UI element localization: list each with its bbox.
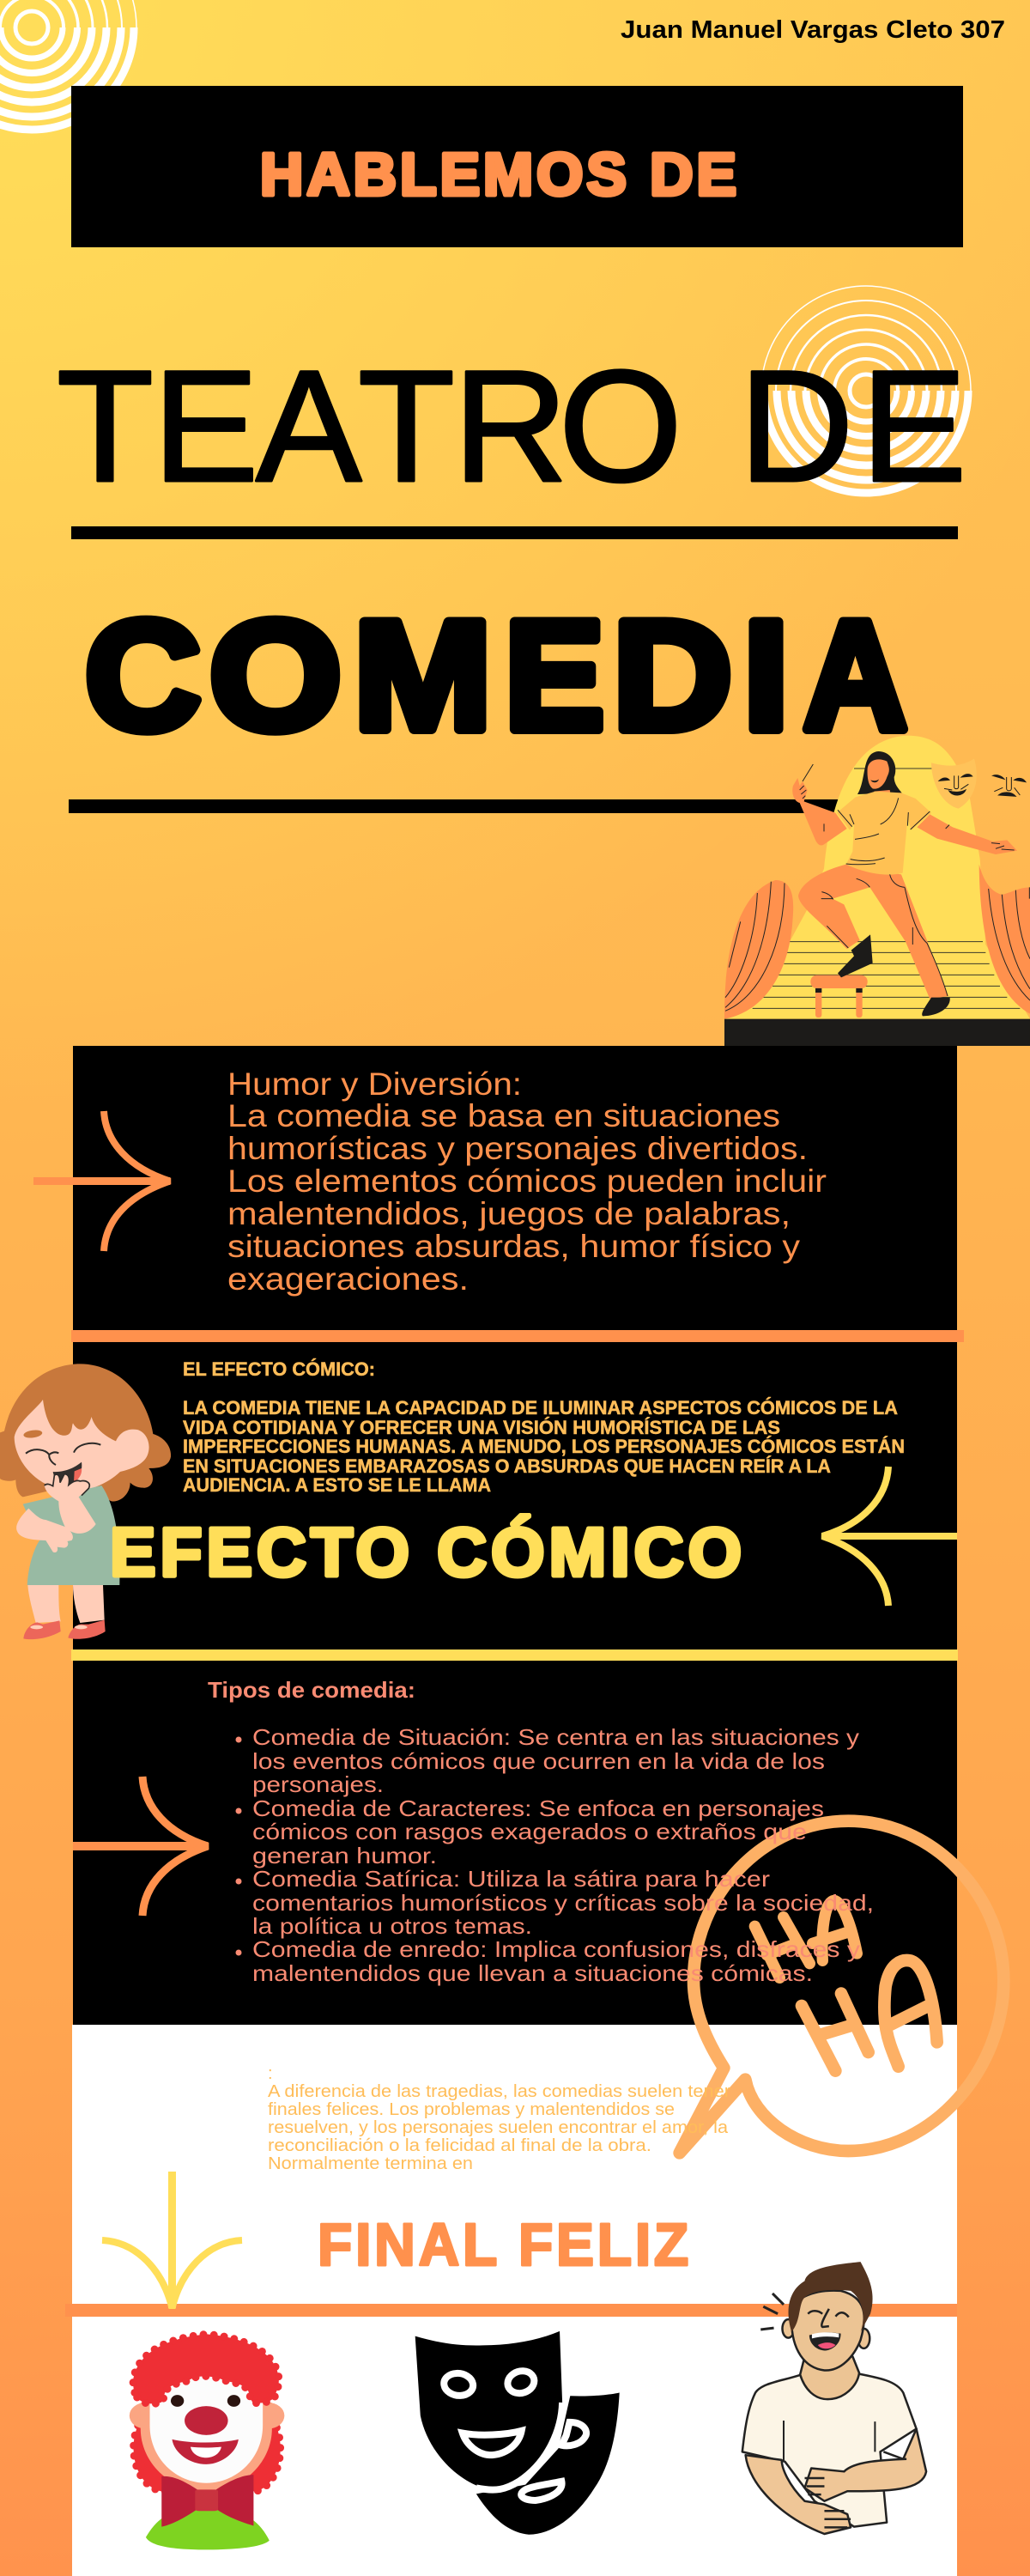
title: comedia: I <box>743 589 789 762</box>
title: comedia: E <box>505 589 604 762</box>
heading: hablemos de: HABLEMOS DE <box>260 141 740 208</box>
title: comedia: D <box>613 589 732 762</box>
decorative spiral: top left <box>0 0 136 130</box>
text block: tipos de comedia: generan humor. <box>252 1843 437 1868</box>
text block: tipos de comedia: malentendidos que llevan a situaciones cómicas. <box>252 1960 813 1986</box>
title: comedia: M <box>354 589 492 762</box>
text block: efecto cómico intro <box>183 1358 905 1496</box>
text block: humor: malentendidos, juegos de palabras, <box>227 1196 791 1231</box>
panel: efecto cómico <box>73 1342 957 1649</box>
divider rule lower <box>69 799 858 813</box>
text block: humor: exageraciones. <box>227 1261 469 1297</box>
text block: efecto cómico intro: IMPERFECCIONES HUMANAS. A MENUDO, LOS PERSONAJES CÓMICOS ESTÁN <box>183 1436 905 1457</box>
heading: efecto cómico: EFECTO CÓMICO <box>110 1514 746 1590</box>
text block: tipos de comedia: los eventos cómicos que ocurren en la vida de los <box>252 1748 825 1774</box>
bullet dots <box>235 1736 242 1956</box>
title: comedia: O <box>209 589 342 762</box>
divider yellow <box>71 1649 958 1661</box>
text block: tipos de comedia: personajes. <box>252 1771 384 1797</box>
title: comedia: C <box>85 589 201 762</box>
text block: final feliz intro: resuelven, y los personajes suelen encontrar el amor, la <box>268 2118 729 2137</box>
decorative spiral: behind title <box>761 286 971 493</box>
arrow: down yellow <box>102 2172 242 2308</box>
arrow: right orange tipos <box>73 1777 208 1916</box>
illustration: performer on stage <box>724 736 1030 1046</box>
icon: theatre masks <box>415 2331 620 2535</box>
text block: efecto cómico intro: EL EFECTO CÓMICO: <box>183 1358 375 1380</box>
panel: humor y diversión <box>33 1046 957 1331</box>
heading: final feliz: FINAL FELIZ <box>318 2211 692 2278</box>
text block: tipos de comedia: Comedia de Situación: Se centra en las situaciones y <box>252 1724 859 1750</box>
panel: final feliz <box>72 2025 957 2576</box>
text block: final feliz intro: A diferencia de las tragedias, las comedias suelen tener <box>268 2082 730 2101</box>
author name: Juan Manuel Vargas Cleto 307 <box>621 16 1005 44</box>
text block: humor: humorísticas y personajes divertidos. <box>227 1131 808 1166</box>
title: teatro de: TEATRO DE <box>57 338 966 515</box>
text block: final feliz intro: : <box>268 2064 273 2083</box>
text block: final feliz intro: finales felices. Los problemas y malentendidos se <box>268 2100 675 2119</box>
divider orange lower <box>65 2304 957 2317</box>
header banner <box>71 86 963 247</box>
divider rule upper <box>71 526 958 539</box>
text block: humor: La comedia se basa en situaciones <box>227 1098 780 1133</box>
illustration: clown <box>130 2334 284 2549</box>
arrow: left yellow <box>822 1467 957 1606</box>
panel: tipos de comedia <box>73 1661 957 2025</box>
text block: tipos de comedia: Comedia de Caracteres: Se enfoca en personajes <box>252 1795 824 1821</box>
title: comedia: A <box>803 589 907 762</box>
text block: tipos de comedia: Comedia Satírica: Utiliza la sátira para hacer <box>252 1866 770 1892</box>
divider orange <box>71 1330 964 1342</box>
speech bubble: ha ha <box>680 1821 1003 2153</box>
text block: tipos de comedia <box>208 1677 874 1986</box>
text block: tipos de comedia: comentarios humorísticos y críticas sobre la sociedad, <box>252 1890 874 1916</box>
text block: final feliz intro: reconciliación o la felicidad al final de la obra. <box>268 2136 651 2155</box>
text block: final feliz intro: Normalmente termina en <box>268 2154 473 2173</box>
text block: efecto cómico intro: AUDIENCIA. A ESTO SE LE LLAMA <box>183 1474 491 1496</box>
title: comedia <box>85 589 907 762</box>
illustration: laughing girl <box>0 1364 171 1639</box>
text block: efecto cómico intro: VIDA COTIDIANA Y OFRECER UNA VISIÓN HUMORÍSTICA DE LAS <box>183 1417 780 1438</box>
illustration: laughing man <box>742 2262 926 2534</box>
text block: humor: situaciones absurdas, humor físico y <box>227 1229 801 1264</box>
text block: efecto cómico intro: EN SITUACIONES EMBARAZOSAS O ABSURDAS QUE HACEN REÍR A LA <box>183 1455 831 1477</box>
arrow: right orange <box>33 1111 170 1251</box>
text block: efecto cómico intro: LA COMEDIA TIENE LA CAPACIDAD DE ILUMINAR ASPECTOS CÓMICOS DE LA <box>183 1397 898 1419</box>
text block: humor: Humor y Diversión: <box>227 1066 522 1102</box>
text block: tipos de comedia: Tipos de comedia: <box>208 1677 415 1703</box>
text block: tipos de comedia: Comedia de enredo: Implica confusiones, disfraces y <box>252 1936 860 1962</box>
text block: humor: Los elementos cómicos pueden incluir <box>227 1163 827 1199</box>
text block: humor <box>227 1066 827 1297</box>
text block: tipos de comedia: cómicos con rasgos exagerados o extraños que <box>252 1819 807 1844</box>
text block: final feliz intro <box>268 2064 730 2173</box>
text block: tipos de comedia: la política u otros temas. <box>252 1913 532 1939</box>
